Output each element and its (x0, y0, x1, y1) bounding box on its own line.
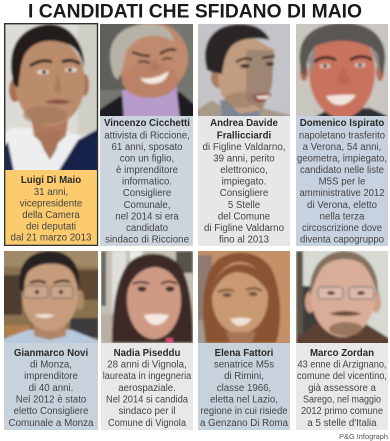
text panel: Marco Zordan: Marco Zordan (310, 348, 374, 359)
panel: Gianmarco Novi (0, 247, 102, 430)
panel: Andrea Davide Frallicciardi (194, 20, 294, 246)
text panel: Nadia Piseddu: aerospaziale. (118, 383, 176, 394)
text panel: Domenico Ispirato: M5S per le (319, 177, 365, 188)
text panel: Elena Fattori: regione in cui risiede (200, 406, 288, 417)
text panel: Elena Fattori: senatrice M5s (214, 360, 274, 370)
text panel: Andrea Davide Frallicciardi: di Figline Valdarno, (202, 142, 286, 153)
text panel: Domenico Ispirato: a Verona, 54 anni, (303, 142, 381, 153)
text panel: Nadia Piseddu: Nel 2014 si candida (106, 394, 189, 406)
text panel: Luigi Di Maio (5, 170, 97, 245)
panel: Domenico Ispirato (292, 20, 390, 246)
text panel: Vincenzo Cicchetti: informatico. (122, 177, 172, 188)
photo: Luigi Di Maio (5, 24, 97, 170)
photo: Gianmarco Novi (4, 251, 98, 343)
text panel: Vincenzo Cicchetti: è imprenditore (116, 165, 178, 176)
text panel: Vincenzo Cicchetti: candidato (126, 223, 168, 234)
credit: P&G Infograph (339, 432, 388, 441)
text panel: Domenico Ispirato (296, 116, 388, 246)
text panel: Andrea Davide Frallicciardi: fino al 2013 (219, 234, 269, 245)
panel: Luigi Di Maio (0, 20, 102, 245)
text panel: Luigi Di Maio: vicepresidente (20, 198, 82, 210)
text panel: Andrea Davide Frallicciardi: 39 anni, perito (213, 154, 275, 165)
text panel: Marco Zordan (296, 343, 388, 430)
text panel: Vincenzo Cicchetti: con un figlio, (120, 154, 174, 165)
text panel: Vincenzo Cicchetti: attivista di Riccione, (104, 130, 190, 142)
photo: Marco Zordan (296, 251, 388, 343)
text panel: Gianmarco Novi: Gianmarco Novi (14, 348, 88, 359)
text panel: Domenico Ispirato: geometra, impiegato, (297, 154, 387, 165)
photo: Domenico Ispirato (296, 24, 388, 116)
text panel: Marco Zordan: comune del vicentino, (297, 371, 387, 382)
text panel: Domenico Ispirato: amministrative 2012 (300, 188, 384, 199)
text panel: Domenico Ispirato: Domenico Ispirato (300, 118, 384, 129)
text panel: Andrea Davide Frallicciardi: impiegato. (222, 177, 266, 188)
text panel: Vincenzo Cicchetti (100, 116, 193, 246)
text panel: Nadia Piseddu: Comune di Vignola (108, 418, 187, 429)
text panel: Gianmarco Novi: di 40 anni. (29, 383, 73, 394)
panel: Elena Fattori (198, 251, 290, 430)
text panel: Andrea Davide Frallicciardi: Andrea Davide (210, 118, 279, 129)
text panel: Marco Zordan: Sarego, nel maggio (303, 394, 381, 406)
photo: Elena Fattori (198, 251, 290, 343)
text panel: Nadia Piseddu: Nadia Piseddu (114, 348, 180, 359)
text panel: Elena Fattori: classe 1966, (217, 383, 271, 394)
text panel: Andrea Davide Frallicciardi (198, 116, 290, 246)
photo: Nadia Piseddu (101, 251, 193, 343)
text panel: Elena Fattori: eletta nel Lazio, (210, 394, 278, 406)
text panel: Gianmarco Novi (4, 343, 98, 430)
text panel: Luigi Di Maio: Luigi Di Maio (21, 175, 81, 186)
text panel: Luigi Di Maio: 31 anni, (34, 187, 68, 198)
text panel: Gianmarco Novi: Comunale a Monza (8, 418, 94, 429)
text panel: Elena Fattori: di Rimini, (224, 371, 264, 382)
text panel: Nadia Piseddu: laureata in ingegneria (103, 371, 192, 382)
text panel: Andrea Davide Frallicciardi: del Comune (218, 211, 270, 222)
text panel: Nadia Piseddu (101, 343, 193, 430)
text panel: Luigi Di Maio: della Camera (22, 210, 80, 221)
text panel: Marco Zordan: 2012 primo comune (301, 406, 383, 417)
text panel: Gianmarco Novi: eletto Consigliere (14, 406, 88, 417)
text panel: Vincenzo Cicchetti: nel 2014 si era (115, 211, 179, 222)
text panel: Domenico Ispirato: circoscrizione dove (302, 223, 382, 234)
text panel: Elena Fattori (198, 343, 290, 430)
text panel: Domenico Ispirato: candidato nelle liste (300, 165, 384, 176)
text panel: Domenico Ispirato: di Verona, eletto (307, 200, 377, 211)
photo border (5, 24, 98, 245)
text panel: Domenico Ispirato: diventa capogruppo (300, 234, 384, 245)
panel: Vincenzo Cicchetti (96, 20, 196, 246)
text panel: Nadia Piseddu: sindaco per il (118, 406, 176, 417)
text panel: Andrea Davide Frallicciardi: di Figline Valdarno (204, 223, 284, 234)
text panel: Domenico Ispirato: napoletano trasferito (299, 130, 385, 142)
text panel: Marco Zordan: 43 enne di Arzignano, (298, 360, 386, 370)
text panel: Andrea Davide Frallicciardi: Consigliere (220, 188, 268, 199)
title: I CANDIDATI CHE SFIDANO DI MAIO (28, 2, 362, 22)
photo: Vincenzo Cicchetti (100, 24, 193, 116)
panel: Nadia Piseddu (101, 251, 193, 430)
text panel: Vincenzo Cicchetti: sindaco di Riccione (105, 234, 189, 245)
text panel: Vincenzo Cicchetti: 61 anni, sposato (111, 142, 183, 153)
text panel: Gianmarco Novi: di Monza, (30, 360, 72, 370)
text panel: Elena Fattori: Elena Fattori (215, 348, 273, 359)
text panel: Vincenzo Cicchetti: Vincenzo Cicchetti (104, 118, 190, 129)
text panel: Andrea Davide Frallicciardi: Frallicciardi (217, 130, 271, 142)
text panel: Marco Zordan: a 5 stelle d'Italia (307, 418, 377, 429)
text panel: Elena Fattori: a Genzano Di Roma (200, 418, 289, 429)
text panel: Luigi Di Maio: dal 21 marzo 2013 (10, 233, 92, 244)
text panel: Marco Zordan: già assessore a (308, 383, 377, 394)
text panel: Gianmarco Novi: Nel 2012 è stato (16, 394, 86, 406)
text panel: Vincenzo Cicchetti: Comunale, (124, 200, 170, 211)
text panel: Luigi Di Maio: dei deputati (26, 221, 76, 232)
text panel: Andrea Davide Frallicciardi: elettronico, (220, 165, 268, 176)
text panel: Nadia Piseddu: 28 anni di Vignola, (107, 360, 187, 370)
text panel: Vincenzo Cicchetti: Consigliere (123, 188, 171, 199)
photo: Andrea Davide Frallicciardi (198, 24, 290, 116)
panel: Marco Zordan (292, 247, 390, 430)
text panel: Gianmarco Novi: imprenditore (24, 371, 78, 382)
text panel: Andrea Davide Frallicciardi: 5 Stelle (228, 200, 260, 211)
text panel: Domenico Ispirato: nella terza (320, 211, 365, 222)
